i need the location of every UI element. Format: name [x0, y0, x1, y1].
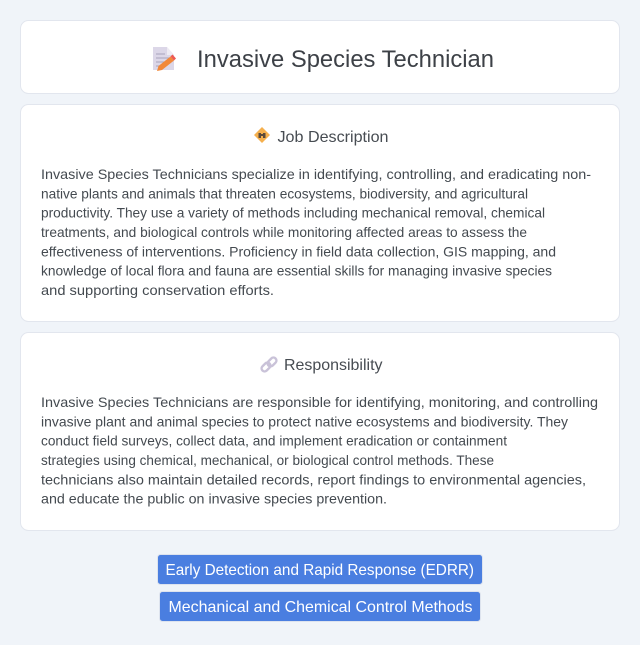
text block: job description: effectiveness of interventions. Proficiency in field data collection, GIS mapping, and [41, 243, 556, 259]
text block: responsibility: and educate the public on invasive species prevention. [41, 491, 387, 507]
text block: job description: knowledge of local flora and fauna are essential skills for managing invasive species [41, 263, 552, 279]
icon: chain link [260, 356, 278, 373]
text block: job description: native plants and animals that threaten ecosystems, biodiversity, and agricultural [41, 185, 528, 201]
icon: document with pencil [153, 47, 176, 71]
heading: responsibility: Responsibility [284, 357, 382, 374]
panel: title card [20, 20, 620, 94]
text block: job description [41, 166, 591, 298]
button: EDRR [158, 554, 482, 584]
text block: job description: treatments, and biological controls while monitoring affected areas to assess the [41, 224, 527, 240]
text block: responsibility: Invasive Species Technicians are responsible for identifying, monitoring, and controlling [41, 394, 598, 410]
text block: responsibility [41, 394, 598, 507]
text block: job description: Invasive Species Technicians specialize in identifying, controlling, and eradicating non- [41, 166, 591, 182]
text block: responsibility: technicians also maintain detailed records, report findings to environmental agencies, [41, 471, 586, 487]
icon: diamond sign [254, 127, 270, 143]
text block: responsibility: conduct field surveys, collect data, and implement eradication or containment [41, 433, 507, 449]
text block: job description: productivity. They use a variety of methods including mechanical removal, chemical [41, 205, 545, 221]
text block: job description: and supporting conservation efforts. [41, 282, 274, 298]
text block: responsibility: strategies using chemical, mechanical, or biological control methods. These [41, 452, 494, 468]
heading: job description: Job Description [278, 129, 388, 146]
button: control methods [160, 592, 480, 622]
button: control methods: Mechanical and Chemical Control Methods [168, 599, 472, 616]
panel: job description [20, 104, 620, 322]
panel: responsibility [20, 332, 620, 530]
text block: responsibility: invasive plant and animal species to protect native ecosystems and biodiversity. They [41, 413, 568, 429]
title: Invasive Species Technician [197, 46, 494, 73]
button: EDRR: Early Detection and Rapid Response (EDRR) [166, 562, 474, 579]
